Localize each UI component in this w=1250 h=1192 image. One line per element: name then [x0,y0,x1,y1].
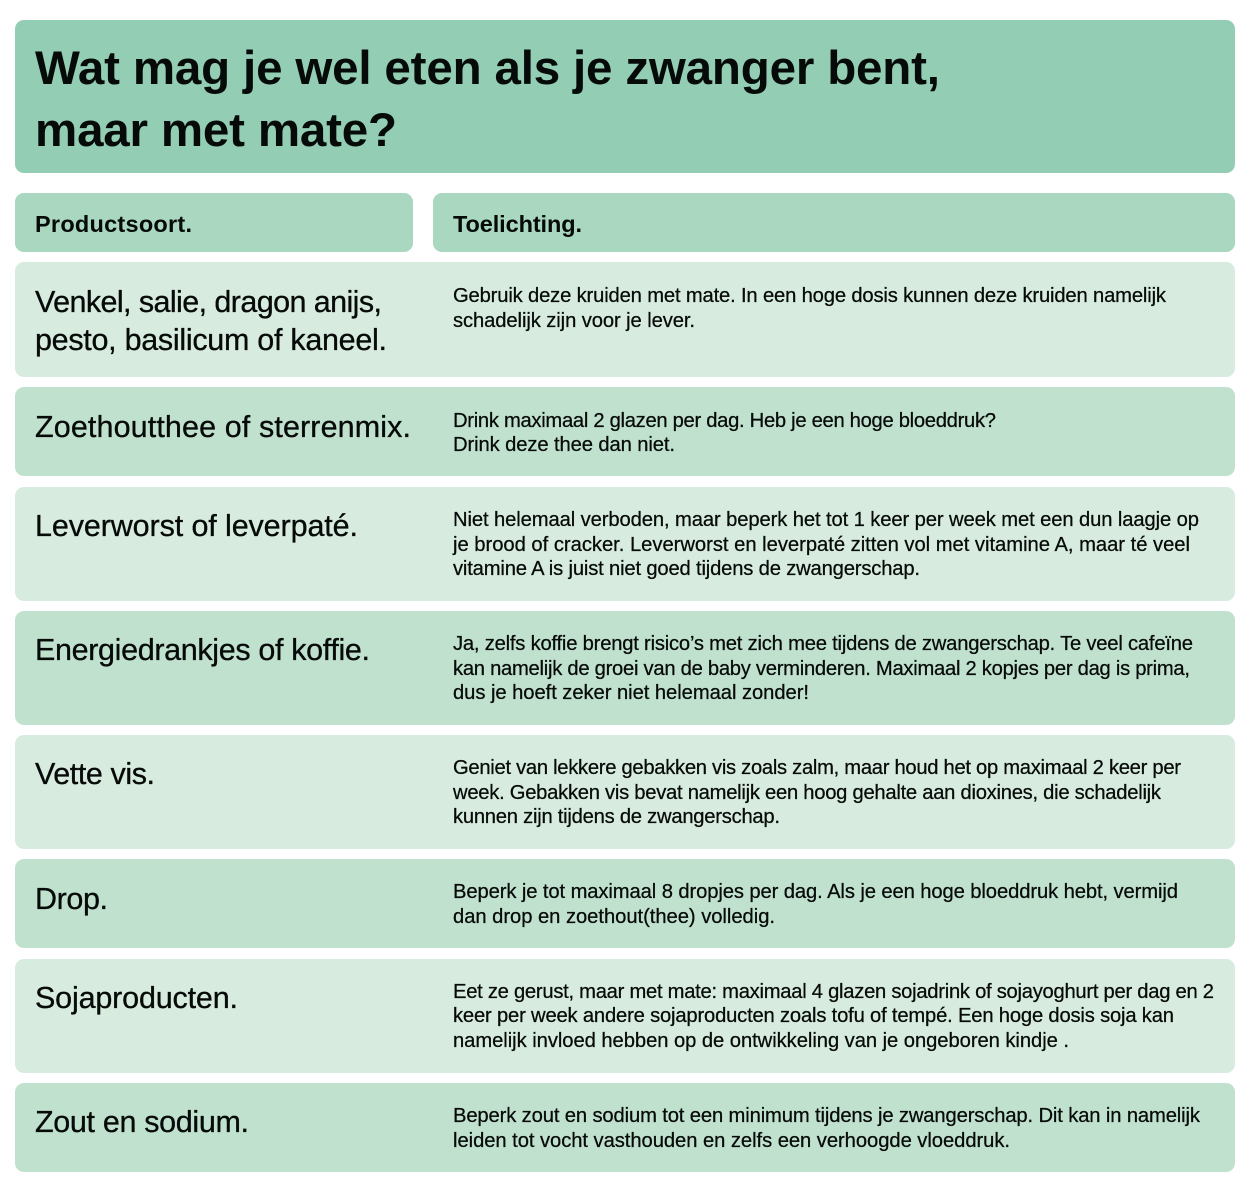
row: Leverworst of leverpaté [15,487,1235,601]
column header: Toelichting [433,193,1235,252]
row: Drop: dan drop en zoethout(thee) volledig. [453,906,775,928]
title banner [15,20,1235,173]
row: Vette vis: kunnen zijn tijdens de zwangerschap. [453,806,780,828]
row: Drop: Drop. [35,882,108,916]
row: Sojaproducten: Eet ze gerust, maar met mate: maximaal 4 glazen sojadrink of sojayoghurt per dag en 2 [453,981,1214,1003]
row: Vette vis [15,735,1235,849]
row: Venkel, salie, dragon anijs: Venkel, salie, dragon anijs, [35,285,382,319]
row: Sojaproducten: namelijk invloed hebben op de ontwikkeling van je ongeboren kindje . [453,1030,1069,1052]
row: Energiedrankjes of koffie [15,611,1235,725]
row: Energiedrankjes of koffie: Energiedrankjes of koffie. [35,633,370,667]
row: Leverworst of leverpaté: Niet helemaal verboden, maar beperk het tot 1 keer per week met een dun laagje op [453,509,1199,531]
row: Venkel, salie, dragon anijs [15,262,1235,377]
row: Zoethoutthee of sterrenmix [15,387,1235,476]
row: Zout en sodium: Zout en sodium. [35,1105,249,1139]
row: Leverworst of leverpaté: je brood of cracker. Leverworst en leverpaté zitten vol met vitamine A, maar té veel [452,534,1190,556]
row: Drop [15,859,1235,948]
column header: Toelichting: Toelichting. [453,211,582,237]
row: Energiedrankjes of koffie: kan namelijk de groei van de baby verminderen. Maximaal 2 kopjes per dag is prima, [453,658,1190,680]
row: Zoethoutthee of sterrenmix: Zoethoutthee of sterrenmix. [35,410,411,444]
row: Zoethoutthee of sterrenmix: Drink deze thee dan niet. [453,434,675,456]
row: Vette vis: week. Gebakken vis bevat namelijk een hoog gehalte aan dioxines, die schadelijk [452,782,1162,804]
row: Leverworst of leverpaté: Leverworst of leverpaté. [35,509,358,543]
row: Leverworst of leverpaté: vitamine A is juist niet goed tijdens de zwangerschap. [453,558,920,580]
row: Energiedrankjes of koffie: Ja, zelfs koffie brengt risico’s met zich mee tijdens de zwangerschap. Te veel cafeïne [453,633,1193,655]
row: Zout en sodium [15,1083,1235,1172]
row: Energiedrankjes of koffie: dus je hoeft zeker niet helemaal zonder! [453,682,809,704]
row: Sojaproducten: keer per week andere sojaproducten zoals tofu of tempé. Een hoge dosis soja kan [453,1005,1174,1027]
row: Sojaproducten: Sojaproducten. [35,981,238,1015]
column header: Productsoort: Productsoort. [35,211,192,237]
row: Vette vis: Vette vis. [35,757,155,791]
title banner: Wat mag je wel eten als je zwanger bent, [35,42,940,95]
row: Zout en sodium: leiden tot vocht vasthouden en zelfs een verhoogde vloeddruk. [453,1130,1010,1152]
column header: Productsoort [15,193,413,252]
row: Venkel, salie, dragon anijs: pesto, basilicum of kaneel. [35,323,387,357]
row: Drop: Beperk je tot maximaal 8 dropjes per dag. Als je een hoge bloeddruk hebt, vermijd [453,881,1178,903]
title banner: maar met mate? [35,104,397,157]
row: Venkel, salie, dragon anijs: schadelijk zijn voor je lever. [453,310,695,332]
row: Sojaproducten [15,959,1235,1073]
row: Venkel, salie, dragon anijs: Gebruik deze kruiden met mate. In een hoge dosis kunnen deze kruiden namelijk [453,285,1167,307]
row: Zoethoutthee of sterrenmix: Drink maximaal 2 glazen per dag. Heb je een hoge bloeddruk? [453,410,996,432]
row: Zout en sodium: Beperk zout en sodium tot een minimum tijdens je zwangerschap. Dit kan in namelijk [453,1105,1201,1127]
row: Vette vis: Geniet van lekkere gebakken vis zoals zalm, maar houd het op maximaal 2 keer per [453,757,1181,779]
